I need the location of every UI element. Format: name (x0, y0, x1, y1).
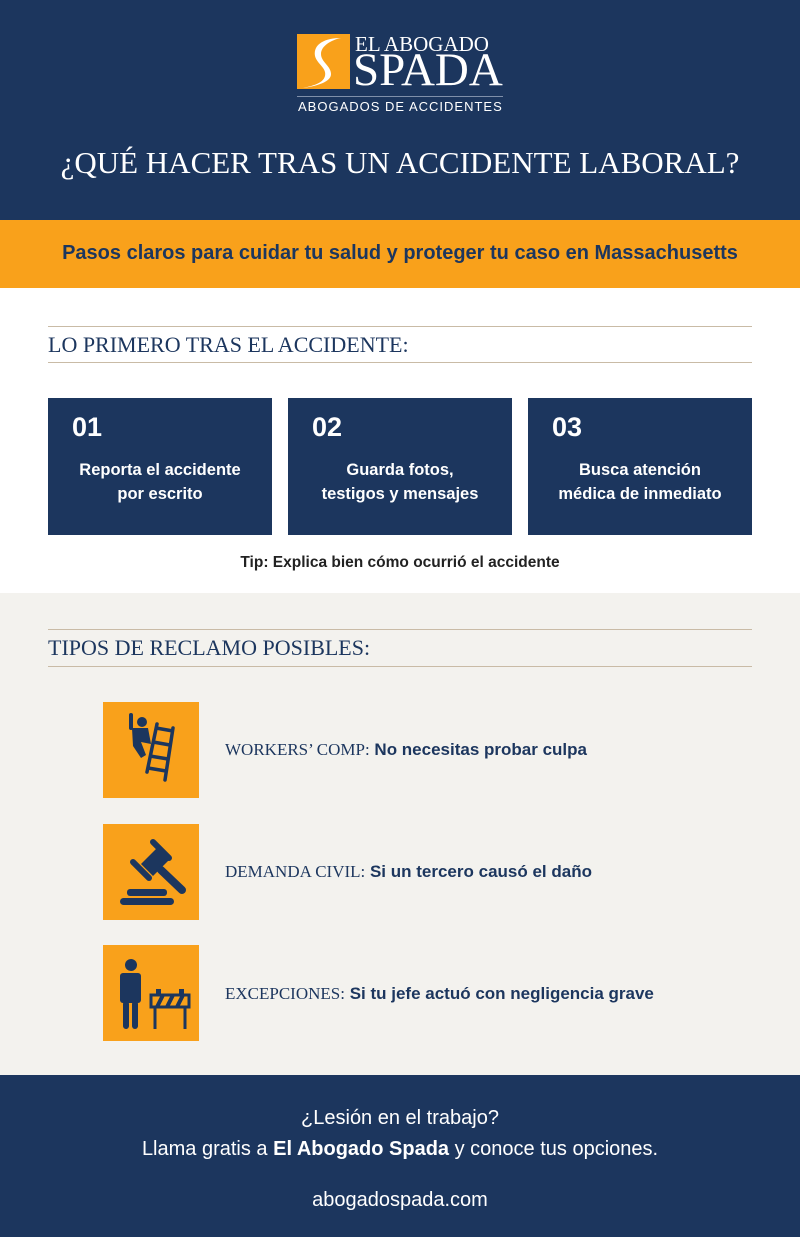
footer call to action: Llama gratis a El Abogado Spada y conoce tus opciones. (142, 1138, 658, 1160)
heading: first steps: LO PRIMERO TRAS EL ACCIDENTE: (48, 332, 409, 357)
header (0, 0, 800, 220)
title: ¿QUÉ HACER TRAS UN ACCIDENTE LABORAL? (61, 145, 739, 180)
logo: ABOGADOS DE ACCIDENTES (298, 99, 503, 114)
heading: claim types: TIPOS DE RECLAMO POSIBLES: (48, 635, 370, 660)
card 01 (48, 398, 272, 535)
card 03: médica de inmediato (558, 485, 722, 503)
card 02 (288, 398, 512, 535)
icon: logo S square (297, 34, 350, 89)
section: claim types (0, 593, 800, 1075)
logo (297, 32, 503, 114)
tip: Tip: Explica bien cómo ocurrió el accidente (240, 554, 560, 571)
footer url: abogadospada.com (312, 1189, 488, 1211)
footer call to action: ¿Lesión en el trabajo? (301, 1107, 499, 1129)
subtitle band: Pasos claros para cuidar tu salud y proteger tu caso en Massachusetts (62, 242, 738, 264)
card 03: 03 (552, 412, 582, 442)
card 02: testigos y mensajes (322, 485, 478, 503)
card 01: Reporta el accidente (79, 461, 241, 479)
card 03 (528, 398, 752, 535)
icon: boss and barrier (103, 945, 199, 1041)
icon: ladder fall (103, 702, 199, 798)
footer call to action (142, 1107, 658, 1160)
card 02: 02 (312, 412, 342, 442)
card 01: por escrito (117, 485, 203, 503)
text: workers comp: WORKERS’ COMP: No necesitas probar culpa (225, 740, 587, 759)
subtitle band (0, 220, 800, 288)
icon: gavel (103, 824, 199, 920)
card 03: Busca atención (579, 461, 701, 479)
card 01: 01 (72, 412, 102, 442)
text: civil suit: DEMANDA CIVIL: Si un tercero causó el daño (225, 862, 592, 881)
text: exceptions: EXCEPCIONES: Si tu jefe actuó con negligencia grave (225, 984, 654, 1003)
footer (0, 1075, 800, 1237)
logo: EL ABOGADO (355, 32, 489, 56)
card 02: Guarda fotos, (346, 461, 454, 479)
logo: SPADA (353, 44, 503, 96)
